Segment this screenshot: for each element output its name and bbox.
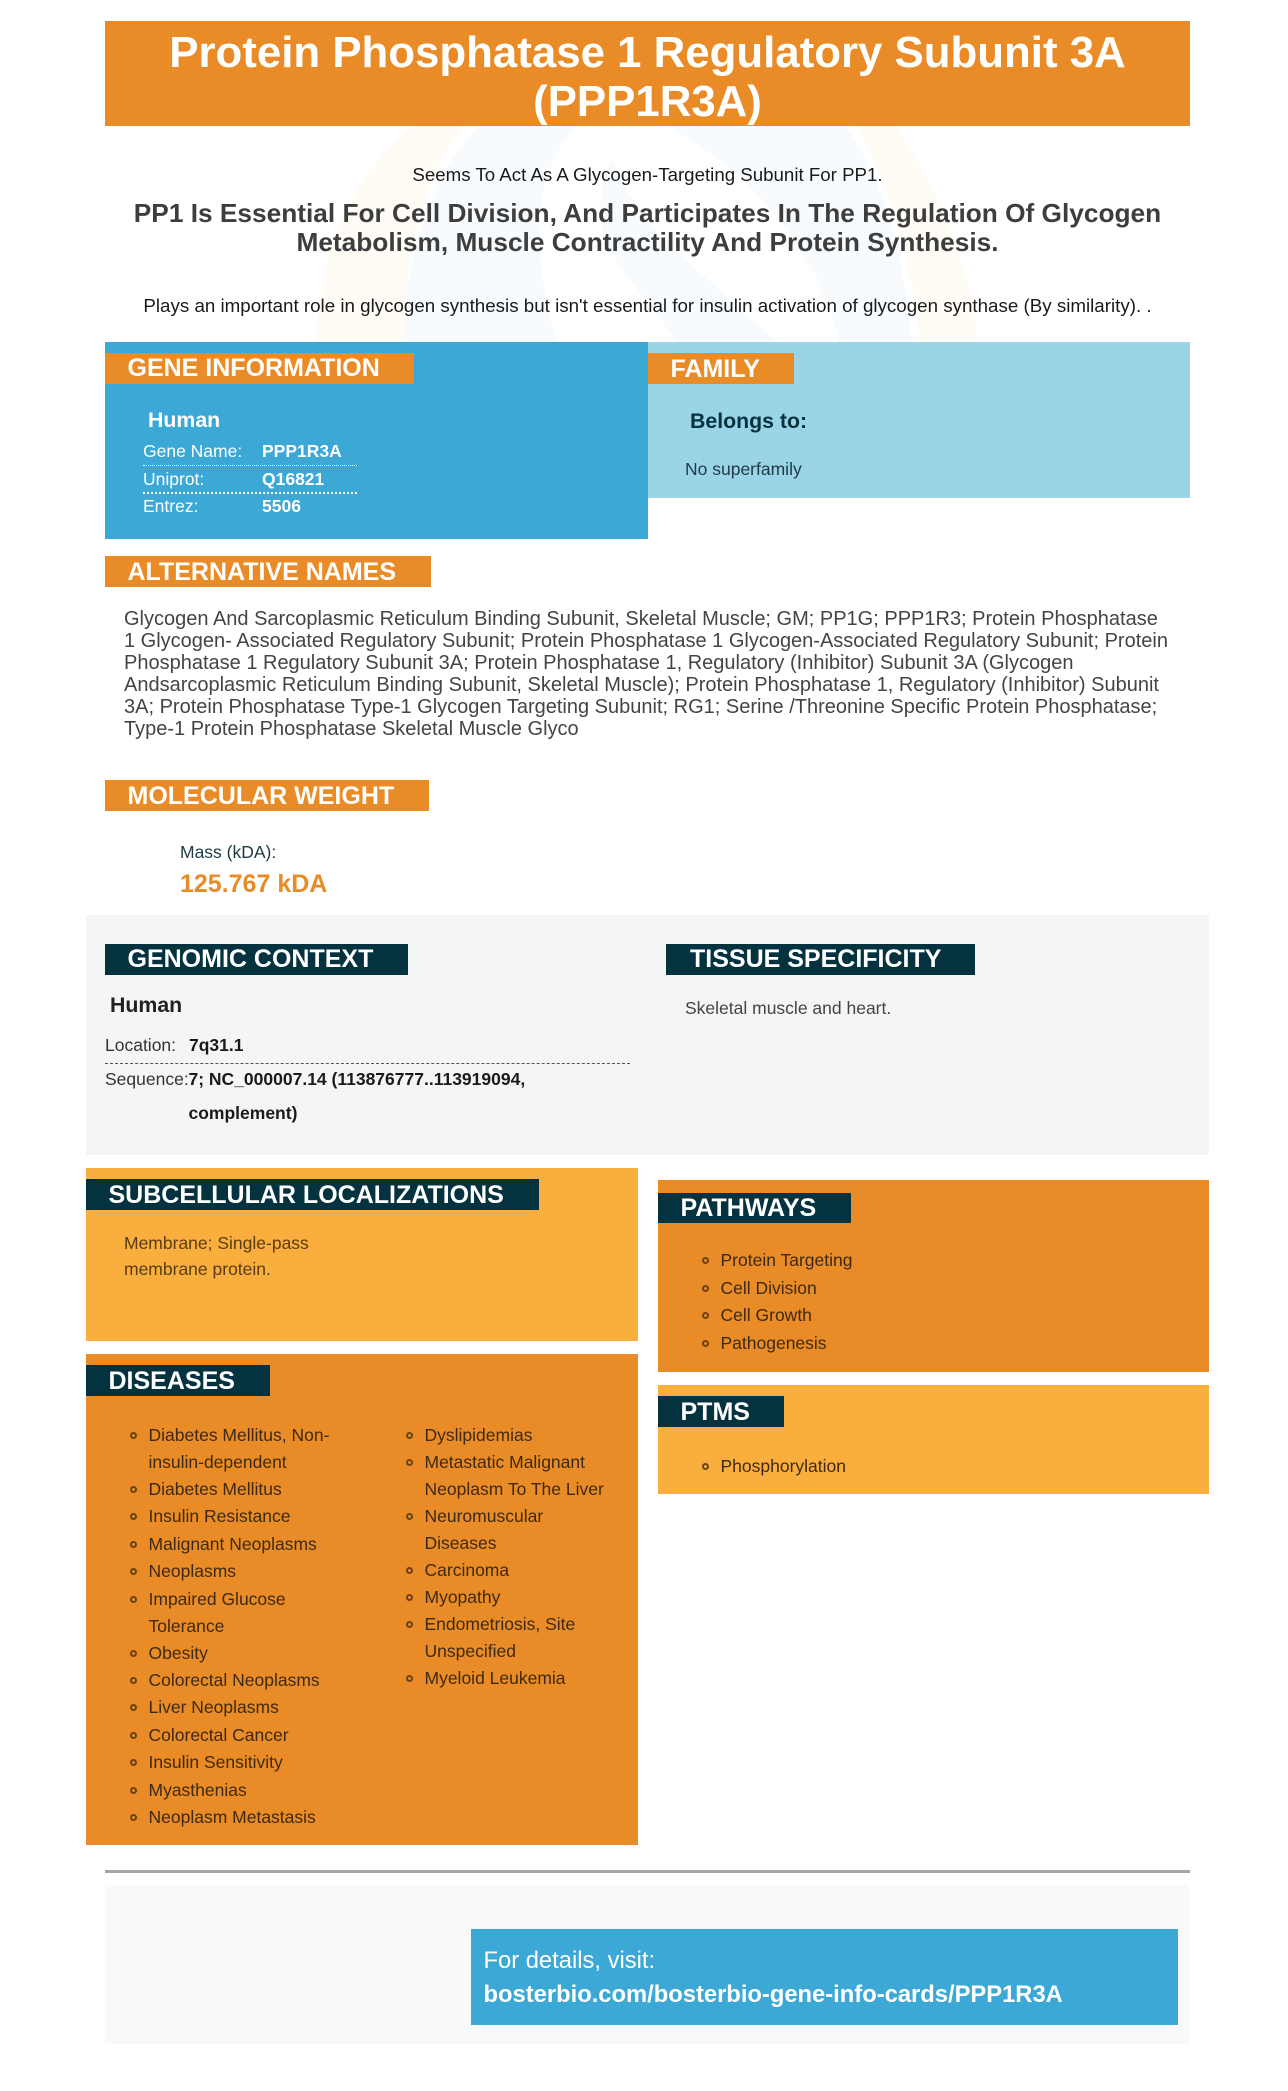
disease list column 2 (406, 1425, 604, 1688)
heading: subcellular localizations: SUBCELLULAR LOCALIZATIONS (108, 1181, 504, 1209)
disease list column 2: Neoplasm To The Liver (424, 1479, 604, 1499)
disease list column 1: Neoplasm Metastasis (148, 1807, 316, 1827)
alternative names text (124, 608, 1168, 740)
function heading: PP1 Is Essential For Cell Division, And Participates In The Regulation Of Glycogen (134, 198, 1161, 228)
pathway list: Pathogenesis (720, 1333, 827, 1353)
location row (105, 1030, 630, 1064)
disease list column 2: Dyslipidemias (424, 1425, 532, 1445)
heading: ptms: PTMS (680, 1398, 750, 1426)
disease list column 1 (130, 1425, 329, 1827)
title banner: (PPP1R3A) (533, 77, 762, 126)
disease list column 1: Neoplasms (148, 1561, 236, 1581)
family value: No superfamily (685, 459, 802, 479)
disease list column 1: Insulin Sensitivity (148, 1752, 283, 1772)
alternative names text: Andsarcoplasmic Reticulum Binding Subunit, Skeletal Muscle); Protein Phosphatase 1, Regulatory (Inhibitor) Subunit (124, 674, 1159, 696)
panel: footer (105, 1885, 1190, 2044)
pathway list: Cell Growth (720, 1305, 812, 1325)
disease list column 2: Myopathy (424, 1587, 500, 1607)
localization text (124, 1233, 309, 1279)
disease list column 1: Myasthenias (148, 1780, 247, 1800)
panel: ptms (658, 1385, 1209, 1494)
disease list column 1: Diabetes Mellitus (148, 1479, 282, 1499)
sequence row: 7; NC_000007.14 (113876777..113919094, (188, 1069, 525, 1089)
callout url: bosterbio.com/bosterbio-gene-info-cards/PPP1R3A (484, 1981, 1063, 2008)
species label: Human (148, 408, 220, 432)
callout: details link (471, 1929, 1178, 2025)
heading: alternative names: ALTERNATIVE NAMES (128, 558, 396, 586)
sequence row: Sequence: (105, 1069, 189, 1089)
pathway list: Cell Division (720, 1278, 817, 1298)
heading: tissue specificity: TISSUE SPECIFICITY (690, 945, 941, 973)
title banner (105, 21, 1190, 126)
uniprot row: Q16821 (262, 469, 324, 489)
disease list column 1: insulin-dependent (148, 1452, 287, 1472)
tissue text: Skeletal muscle and heart. (685, 998, 891, 1018)
panel: diseases (86, 1354, 638, 1845)
disease list column 2: Metastatic Malignant (424, 1452, 585, 1472)
alternative names text: 3A; Protein Phosphatase Type-1 Glycogen Targeting Subunit; RG1; Serine /Threonine Specific Protein Phosphatase; (124, 696, 1157, 718)
alternative names text: Phosphatase 1 Regulatory Subunit 3A; Protein Phosphatase 1, Regulatory (Inhibitor) Subunit 3A (Glycogen (124, 652, 1073, 674)
species label: Human (110, 993, 182, 1017)
alternative names text: Type-1 Protein Phosphatase Skeletal Muscle Glyco (124, 718, 579, 740)
uniprot row: Uniprot: (143, 469, 204, 489)
disease list column 1: Liver Neoplasms (148, 1697, 279, 1717)
intro line: Seems To Act As A Glycogen-Targeting Subunit For PP1. (412, 164, 883, 185)
heading: diseases: DISEASES (108, 1367, 235, 1395)
disease list column 1: Insulin Resistance (148, 1506, 291, 1526)
heading: molecular weight: MOLECULAR WEIGHT (128, 782, 394, 810)
heading: family (648, 353, 794, 384)
gene name row: PPP1R3A (262, 441, 342, 461)
sequence row: complement) (188, 1103, 297, 1123)
disease list column 2: Endometriosis, Site (424, 1614, 575, 1634)
callout label: For details, visit: (484, 1947, 655, 1974)
disease list column 2: Neuromuscular (424, 1506, 543, 1526)
entrez row: 5506 (262, 496, 301, 516)
heading: diseases (86, 1365, 270, 1396)
localization text: Membrane; Single-pass (124, 1233, 309, 1253)
watermark logo (316, 126, 978, 342)
disease list column 1: Diabetes Mellitus, Non- (148, 1425, 329, 1445)
alternative names text: Glycogen And Sarcoplasmic Reticulum Binding Subunit, Skeletal Muscle; GM; PP1G; PPP1R3; Protein Phosphatase (124, 608, 1158, 630)
heading: family: FAMILY (670, 355, 760, 383)
disease list column 2: Diseases (424, 1533, 496, 1553)
heading: gene information: GENE INFORMATION (128, 354, 380, 382)
disease list column 1: Obesity (148, 1643, 208, 1663)
panel: subcellular localizations (86, 1168, 638, 1341)
ptm list: Phosphorylation (720, 1456, 846, 1476)
panel: pathways (658, 1180, 1209, 1372)
location row: 7q31.1 (189, 1035, 243, 1055)
alternative names text: 1 Glycogen- Associated Regulatory Subunit; Protein Phosphatase 1 Glycogen-Associated Regulatory Subunit; Protein (124, 630, 1168, 652)
localization text: membrane protein. (124, 1259, 271, 1279)
panel: genomic context and tissue specificity (86, 915, 1209, 1155)
panel: gene information (105, 342, 648, 539)
gene name row (143, 438, 357, 466)
belongs to label: Belongs to: (690, 409, 807, 433)
heading: pathways: PATHWAYS (680, 1194, 816, 1222)
disease list column 1: Colorectal Neoplasms (148, 1670, 320, 1690)
gene name row: Gene Name: (143, 441, 242, 461)
uniprot row (143, 466, 357, 494)
description: Plays an important role in glycogen synthesis but isn't essential for insulin activation of glycogen synthase (By similarity). . (143, 295, 1152, 316)
mass label: Mass (kDA): (180, 842, 276, 862)
disease list column 2: Unspecified (424, 1641, 516, 1661)
heading: pathways (658, 1193, 851, 1223)
disease list column 1: Tolerance (148, 1616, 224, 1636)
disease list column 1: Malignant Neoplasms (148, 1534, 317, 1554)
disease list column 1: Impaired Glucose (148, 1589, 286, 1609)
pathway list: Protein Targeting (720, 1250, 852, 1270)
location row: Location: (105, 1035, 176, 1055)
sequence row (105, 1069, 525, 1123)
title banner: Protein Phosphatase 1 Regulatory Subunit 3A (169, 28, 1126, 77)
pathway list (702, 1250, 852, 1353)
panel: family (648, 342, 1190, 498)
disease list column 2: Myeloid Leukemia (424, 1668, 566, 1688)
entrez row: Entrez: (143, 496, 198, 516)
heading: genomic context: GENOMIC CONTEXT (128, 945, 373, 973)
disease list column 1: Colorectal Cancer (148, 1725, 289, 1745)
entrez row (143, 496, 301, 516)
function heading (134, 198, 1161, 257)
disease list column 2: Carcinoma (424, 1560, 509, 1580)
heading: ptms (658, 1396, 784, 1427)
mass value: 125.767 kDA (180, 870, 327, 898)
function heading: Metabolism, Muscle Contractility And Protein Synthesis. (296, 227, 999, 257)
